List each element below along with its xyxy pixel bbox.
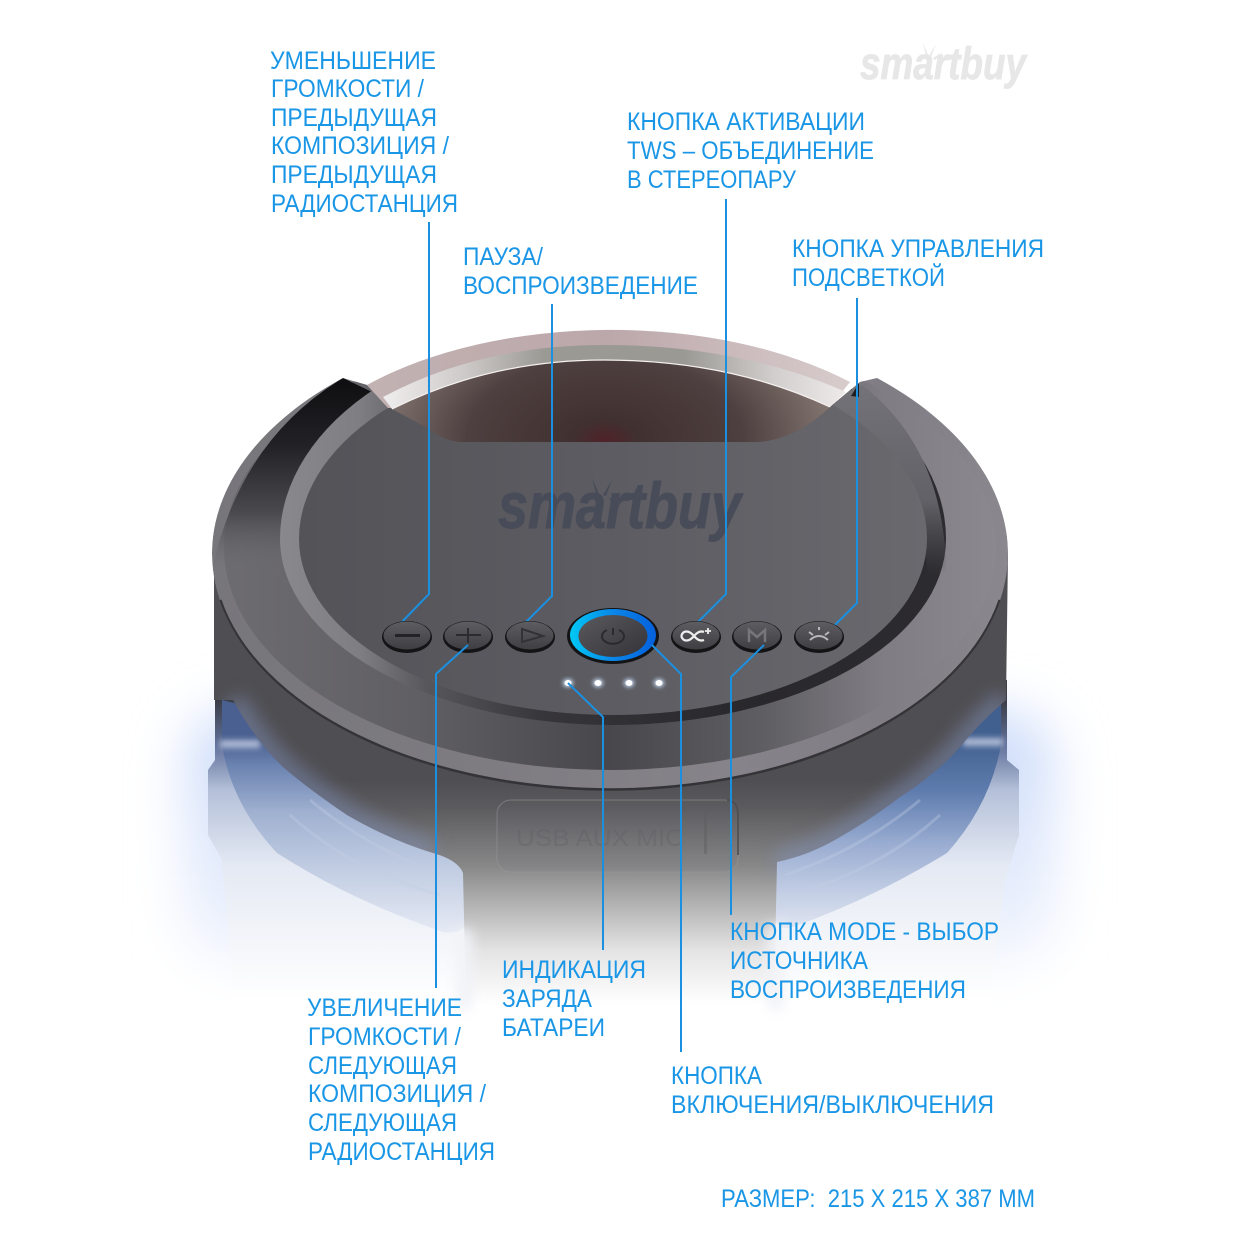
label: mode: ВОСПРОИЗВЕДЕНИЯ: [730, 976, 966, 1004]
soft blue edge on wall: [233, 700, 1006, 862]
inner disc: [299, 405, 927, 715]
label: next: СЛЕДУЮЩАЯ: [308, 1109, 457, 1137]
label: TWS: TWS – ОБЪЕДИНЕНИЕ: [627, 137, 874, 165]
outer disc: [212, 378, 1008, 791]
play glyph: [522, 629, 543, 642]
backlight base: [794, 621, 844, 653]
plus base: [443, 621, 493, 653]
label: previous: ПРЕДЫДУЩАЯ: [271, 104, 437, 132]
label: mode: ИСТОЧНИКА: [730, 947, 868, 975]
label: previous: ПРЕДЫДУЩАЯ: [271, 161, 437, 189]
line: TWS: [693, 199, 726, 627]
logo on deck: [498, 469, 743, 542]
leader lines: [397, 199, 857, 635]
plus glyph: [456, 628, 481, 643]
label: previous: [270, 47, 458, 218]
port cover: [497, 800, 738, 872]
plus face: [444, 622, 492, 650]
mode base: [732, 621, 782, 653]
power halo: [567, 608, 659, 664]
soft column edge right: [768, 925, 784, 1010]
button: mode: [732, 621, 782, 653]
silver band: [383, 345, 846, 409]
label: previous: ГРОМКОСТИ /: [271, 75, 424, 103]
power face: [578, 615, 648, 657]
line: previous: [397, 222, 429, 627]
lower leader lines: [436, 645, 764, 1052]
top-right logo: [860, 38, 1028, 89]
line: plus: [436, 645, 468, 988]
label: pause: ВОСПРОИЗВЕДЕНИЕ: [463, 272, 698, 300]
rim face: [224, 381, 864, 770]
logo word: smartbuy: [860, 38, 1028, 89]
label: backlight: ПОДСВЕТКОЙ: [792, 262, 945, 292]
rim band: [212, 378, 1008, 788]
port cover plate: [497, 800, 738, 872]
power ring: [570, 609, 656, 661]
red-brown window: [392, 360, 830, 442]
label: size: РАЗМЕР: 215 X 215 X 387 ММ: [721, 1185, 1035, 1213]
button: power: [567, 608, 659, 664]
label: backlight: [792, 235, 1044, 292]
TWS glyph: [682, 632, 704, 640]
TWS face: [672, 622, 720, 650]
logo word: smartbuy: [498, 469, 743, 542]
label: previous: РАДИОСТАНЦИЯ: [271, 190, 458, 218]
left grille: [222, 700, 466, 932]
label: next: ГРОМКОСТИ /: [308, 1023, 461, 1051]
window highlight: [392, 360, 830, 409]
logo rays: [923, 43, 943, 60]
minus glyph: [395, 634, 420, 637]
label: TWS: [627, 108, 874, 194]
label: battery: [502, 956, 646, 1042]
port slot: [704, 814, 707, 854]
mode face: [734, 622, 780, 650]
label: next: СЛЕДУЮЩАЯ: [308, 1052, 457, 1080]
left grille arcs: [290, 800, 445, 895]
button: minus: [382, 621, 432, 653]
top deck: [212, 316, 1008, 790]
TWS base: [671, 621, 721, 653]
label: power: ВКЛЮЧЕНИЯ/ВЫКЛЮЧЕНИЯ: [671, 1091, 994, 1119]
backlight glyph: [809, 627, 829, 640]
black left rim: [218, 378, 371, 550]
right grille arcs: [785, 800, 940, 895]
backlight face: [796, 622, 842, 650]
line: mode: [731, 645, 764, 915]
label: previous: УМЕНЬШЕНИЕ: [270, 47, 436, 75]
dots: [564, 680, 662, 686]
label: backlight: КНОПКА УПРАВЛЕНИЯ: [792, 235, 1044, 263]
label: next: КОМПОЗИЦИЯ /: [308, 1080, 486, 1108]
ring right upper: [832, 389, 946, 562]
label: next: [307, 994, 495, 1166]
label: next: УВЕЛИЧЕНИЕ: [307, 994, 462, 1022]
port labels: USB AUX MIC: [516, 825, 684, 852]
blue glow behind speaker: [185, 712, 1055, 962]
soft column edge left: [456, 930, 472, 1010]
right grille: [775, 700, 1001, 928]
line: pause: [520, 304, 552, 628]
right light stripe: [963, 738, 1003, 746]
label: battery: ИНДИКАЦИЯ: [502, 956, 646, 984]
label: power: [671, 1062, 994, 1119]
button: backlight: [794, 621, 844, 653]
logo rays: [592, 478, 622, 501]
label: battery: ЗАРЯДА: [502, 985, 592, 1013]
central column and lower wall: [214, 553, 1008, 1005]
label: power: КНОПКА: [671, 1062, 762, 1090]
label: mode: [730, 918, 999, 1004]
button: TWS: [671, 621, 721, 653]
label: pause: [463, 243, 698, 300]
control buttons: [382, 608, 844, 664]
label: previous: КОМПОЗИЦИЯ /: [271, 132, 449, 160]
rim shadow line: [220, 600, 1000, 790]
label: TWS: В СТЕРЕОПАРУ: [627, 166, 796, 194]
line: backlight: [825, 298, 857, 635]
button: play: [505, 621, 555, 653]
play face: [506, 622, 554, 650]
minus base: [382, 621, 432, 653]
line: power: [652, 645, 681, 1052]
minus face: [384, 622, 430, 650]
TWS plus: [705, 628, 711, 634]
battery indicator dots: [563, 679, 664, 687]
dot glow: [563, 679, 664, 687]
notch shadow: [851, 383, 859, 397]
port cover dark edge: [727, 800, 738, 855]
play base: [505, 621, 555, 653]
speaker side housing: [208, 680, 1019, 1005]
line: battery: [568, 683, 603, 950]
label: TWS: КНОПКА АКТИВАЦИИ: [627, 108, 865, 136]
label: pause: ПАУЗА/: [463, 243, 543, 271]
power glyph: [602, 628, 624, 644]
left light stripe: [220, 740, 260, 748]
label: mode: КНОПКА MODE - ВЫБОР: [730, 918, 999, 946]
ring: [280, 389, 946, 725]
speaker body: [208, 553, 1019, 1010]
button: plus: [443, 621, 493, 653]
label: battery: БАТАРЕИ: [502, 1014, 605, 1042]
label: next: РАДИОСТАНЦИЯ: [308, 1138, 495, 1166]
mode glyph: [749, 630, 765, 642]
rose gold band: [367, 330, 850, 408]
